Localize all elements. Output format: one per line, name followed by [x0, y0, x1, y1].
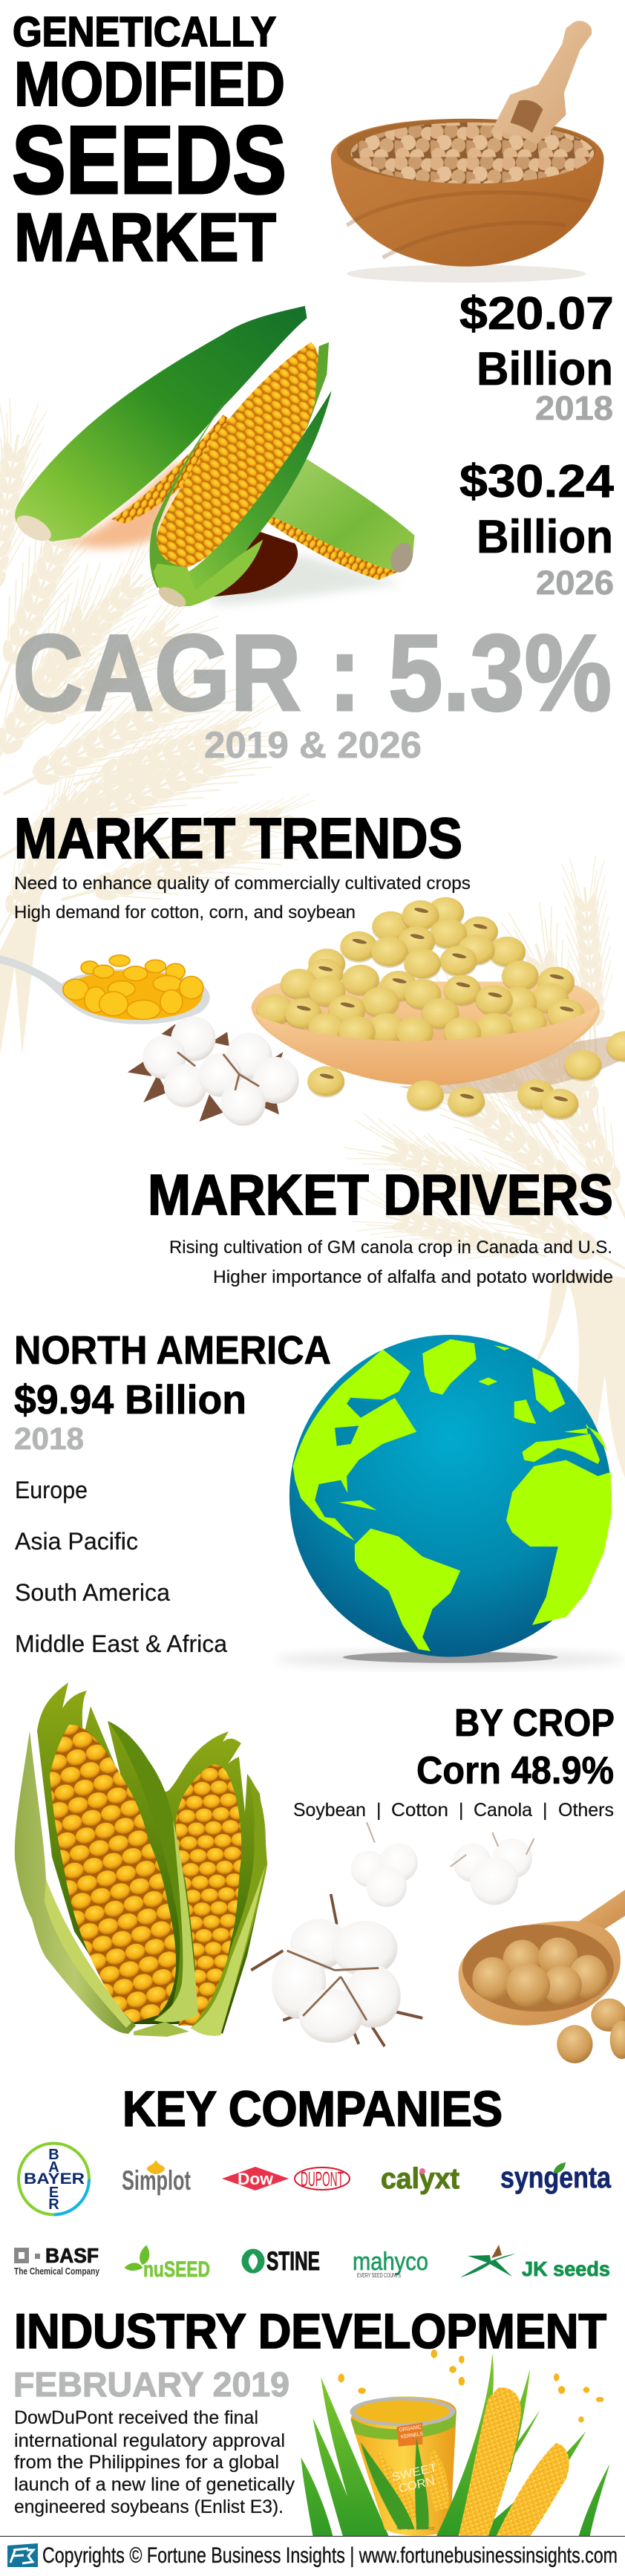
section: market trends: MARKET TRENDS: [14, 807, 462, 871]
section: regions: NORTH AMERICA: [14, 1328, 331, 1373]
logo: Stine: [242, 2247, 320, 2276]
section: by crop: [293, 1702, 615, 1821]
section: by crop: Corn 48.9%: [416, 1749, 614, 1792]
logo: Mahyco: EVERY SEED COUNTS: [357, 2272, 401, 2279]
logo: Dow and DuPont: DUPONT: [301, 2167, 344, 2190]
icon: bowl of soybeans: [251, 897, 625, 1120]
section: by crop: |: [376, 1800, 382, 1821]
stat: 2018 market size: [459, 288, 614, 427]
section: by crop: |: [543, 1800, 548, 1821]
text block: February 2019 development: engineered soybeans (Enlist E3).: [14, 2497, 284, 2517]
background: wheat decoration: [0, 396, 625, 1478]
logo: Bayer: E: [49, 2185, 59, 2201]
section: by crop: Soybean: [293, 1800, 366, 1821]
stat: 2026 market size: [459, 456, 615, 602]
text block: February 2019 development: [13, 2365, 295, 2517]
title: [12, 8, 287, 276]
logo: Simplot: [122, 2160, 191, 2196]
stat: 2018 market size: 2018: [535, 389, 613, 427]
section: by crop: |: [459, 1800, 463, 1821]
logo: JK Seeds: JK seeds: [522, 2257, 610, 2280]
section: regions: $9.94 Billion: [14, 1376, 246, 1422]
text block: February 2019 development: launch of a new line of genetically: [14, 2474, 295, 2495]
section: regions: Asia Pacific: [15, 1528, 138, 1555]
section: regions: Europe: [15, 1477, 88, 1503]
icon: sweet corn can with leaves: CORN: [397, 2474, 436, 2496]
icon: large cotton boll and spoon of soybeans: [251, 1890, 625, 2063]
text block: February 2019 development: from the Philippines for a global: [14, 2452, 279, 2473]
logo: JK Seeds: [460, 2245, 610, 2280]
logo: Dow and DuPont: [222, 2167, 350, 2190]
stat: 2026 market size: 2026: [536, 564, 614, 602]
logo: BASF: [14, 2244, 100, 2277]
logo: Dow and DuPont: Dow: [238, 2170, 274, 2188]
logo: Bayer: [19, 2144, 89, 2215]
section: market drivers: [148, 1163, 613, 1287]
section: market drivers: Rising cultivation of GM canola crop in Canada and U.S.: [169, 1237, 612, 1258]
logo: Calyxt: calyxt: [381, 2163, 459, 2195]
logo: BASF: The Chemical Company: [14, 2266, 100, 2277]
logo: Bayer: BAYER: [24, 2170, 85, 2188]
section: by crop: Canola: [474, 1800, 532, 1821]
logo: Bayer: R: [48, 2196, 59, 2213]
text block: February 2019 development: FEBRUARY 2019: [13, 2365, 289, 2404]
section: regions: 2018: [14, 1421, 84, 1456]
section: by crop: Cotton: [391, 1800, 448, 1821]
icon: wooden bowl of soybeans with scoop: [331, 21, 604, 282]
section: regions: Middle East & Africa: [15, 1630, 227, 1657]
icon: two ears of corn with leaves: [15, 1682, 267, 2037]
section: regions: South America: [15, 1579, 170, 1606]
logo: Bayer: B: [48, 2147, 59, 2163]
section: regions: [14, 1328, 331, 1657]
stat: 2026 market size: $30.24: [459, 456, 615, 507]
icon: sweet corn can with leaves: ORGANIC: [399, 2424, 422, 2433]
icon: sweet corn can with leaves: SWEET: [390, 2461, 438, 2485]
section: market trends: Need to enhance quality of commercially cultivated crops: [14, 874, 471, 894]
logo: Stine: STINE: [266, 2247, 320, 2276]
stat: 2026 market size: Billion: [477, 511, 613, 563]
heading: key companies: KEY COMPANIES: [122, 2081, 503, 2137]
icon: sweet corn can with leaves: [301, 2349, 610, 2536]
icon: cotton bolls, by crop: [351, 1822, 534, 1907]
logo: Nuseed: nuSEED: [143, 2257, 210, 2282]
logo: Mahyco: mahyco: [353, 2248, 428, 2276]
icon: sweet corn can with leaves: NET WT 15.25 OZ: [396, 2527, 435, 2531]
title: MODIFIED: [14, 49, 285, 119]
title: MARKET: [14, 200, 276, 276]
text block: February 2019 development: DowDuPont received the final: [14, 2407, 258, 2428]
icon: three corn cobs: [13, 306, 416, 611]
logo: Simplot: Simplot: [122, 2165, 191, 2196]
title: GENETICALLY: [13, 8, 276, 56]
text block: February 2019 development: international regulatory approval: [14, 2430, 285, 2451]
icon: cotton bolls: [128, 1016, 299, 1126]
section: by crop: BY CROP: [454, 1702, 615, 1745]
section: by crop: Others: [558, 1800, 614, 1821]
section: market drivers: Higher importance of alfalfa and potato worldwide: [213, 1267, 613, 1287]
logo: Bayer: A: [48, 2159, 59, 2176]
icon: spoon of corn kernels: [0, 955, 210, 1024]
icon: sweet corn can with leaves: KERNELS: [401, 2431, 424, 2440]
stat: 2018 market size: $20.07: [459, 288, 614, 339]
logo: BASF: BASF: [45, 2244, 99, 2267]
section: market trends: High demand for cotton, corn, and soybean: [14, 902, 356, 923]
title: SEEDS: [12, 105, 287, 214]
logo: Nuseed: [125, 2246, 210, 2282]
section: market trends: [14, 807, 471, 923]
stat: 2018 market size: Billion: [477, 343, 613, 395]
icon: globe: [275, 1335, 625, 1668]
stat: CAGR: 2019 & 2026: [204, 724, 422, 766]
